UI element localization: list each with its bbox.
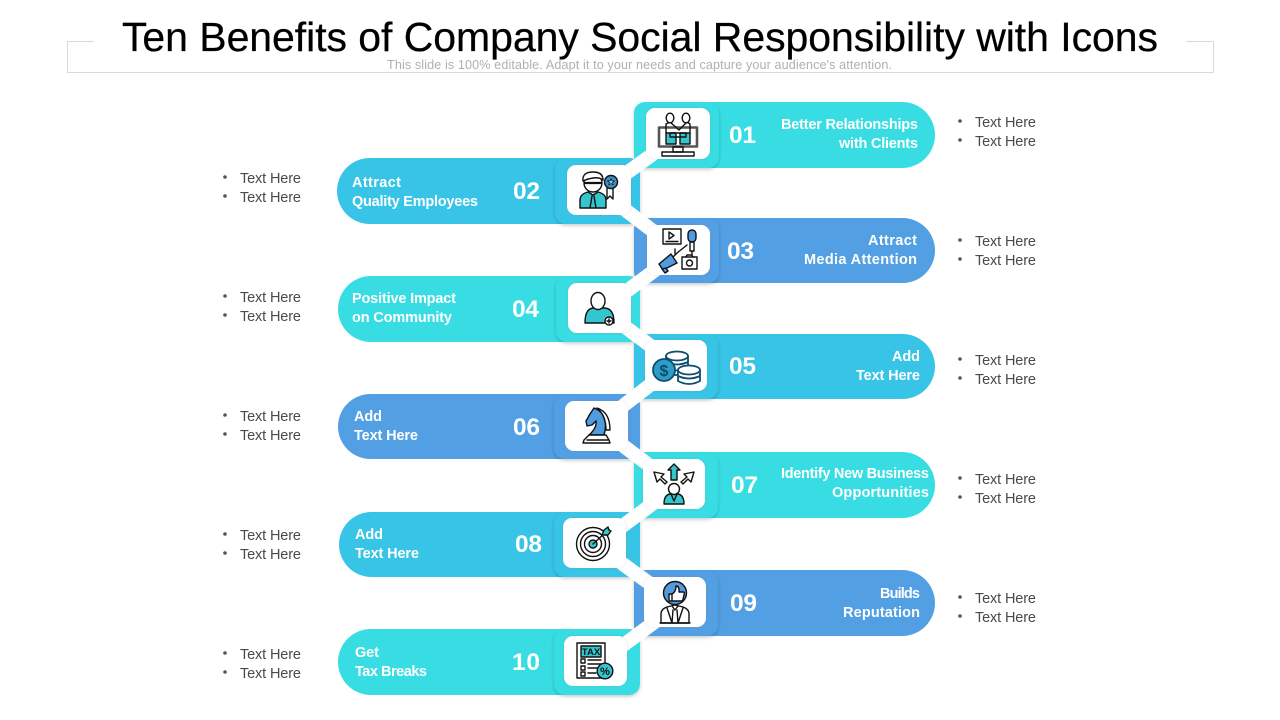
text list: benefit 02: Text Here — [240, 171, 301, 187]
panel: benefit 05 bar: Text Here — [856, 368, 920, 384]
icon: tax form with percent badge: TAX — [582, 647, 601, 658]
panel: benefit 07 bar: Opportunities — [832, 485, 929, 501]
text list: benefit 07: Text Here — [975, 472, 1036, 488]
panel: benefit 02 bar: 02 — [513, 178, 540, 205]
panel: benefit 05 bar: Add — [892, 349, 920, 365]
panel: benefit 10 bar — [338, 629, 640, 695]
icon: person with three arrows — [654, 464, 694, 504]
icon: businessman with thumbs up — [660, 582, 690, 623]
text list: benefit 03: Text Here — [975, 234, 1036, 250]
title: Ten Benefits of Company Social Responsibility with Icons — [122, 14, 1158, 60]
text list: benefit 04: Text Here — [240, 290, 301, 306]
text list: benefit 01: Text Here — [975, 115, 1036, 131]
text list: benefit 09: Text Here — [975, 610, 1036, 626]
panel: benefit 01 bar: 01 — [729, 122, 756, 149]
panel: benefit 05 bar — [634, 334, 935, 399]
text list: benefit 07: Text Here — [975, 491, 1036, 507]
panel: benefit 09 bar: Reputation — [843, 605, 920, 621]
panel: benefit 04 bar: 04 — [512, 296, 539, 323]
text list: benefit 10: Text Here — [240, 647, 301, 663]
panel: benefit 04 bar: Positive Impact — [352, 291, 456, 307]
text list: benefit 07 — [958, 472, 1036, 507]
text list: benefit 08: Text Here — [240, 547, 301, 563]
text list: benefit 10: Text Here — [240, 666, 301, 682]
panel: benefit 08 bar: Text Here — [355, 546, 419, 562]
icon: chess knight — [583, 408, 610, 443]
panel: benefit 05 bar: 05 — [729, 353, 756, 380]
panel: benefit 03 bar: Media Attention — [804, 252, 917, 268]
text list: benefit 08: Text Here — [240, 528, 301, 544]
panel: benefit 01 bar: with Clients — [838, 136, 918, 152]
text list: benefit 08 — [223, 528, 301, 563]
panel: benefit 08 bar: 08 — [515, 531, 542, 558]
icon: coins with dollar — [653, 352, 700, 384]
icon: employee with award ribbon — [580, 172, 618, 208]
text list: benefit 05: Text Here — [975, 353, 1036, 369]
panel: benefit 02 bar — [337, 158, 640, 224]
text list: benefit 09 — [958, 591, 1036, 626]
text list: benefit 01: Text Here — [975, 134, 1036, 150]
panel: benefit 03 bar: 03 — [727, 238, 754, 265]
text list: benefit 06 — [223, 409, 301, 444]
panel: benefit 10 bar: Get — [355, 645, 379, 661]
text list: benefit 05: Text Here — [975, 372, 1036, 388]
zigzag connector — [594, 136, 678, 666]
icon: person with plus badge — [585, 292, 614, 325]
icon: coins with dollar: $ — [660, 363, 669, 380]
text list: benefit 02 — [223, 171, 301, 206]
panel: benefit 06 bar: Add — [354, 409, 382, 425]
text list: benefit 06: Text Here — [240, 428, 301, 444]
panel: benefit 02 bar: Attract — [352, 175, 401, 191]
panel: benefit 06 bar: 06 — [513, 414, 540, 441]
icon: media microphone, video and megaphone — [659, 229, 697, 273]
panel: benefit 07 bar: Identify New Business — [781, 466, 929, 482]
text list: benefit 06: Text Here — [240, 409, 301, 425]
panel: benefit 10 bar: 10 — [512, 649, 540, 676]
panel: benefit 09 bar: Builds — [880, 586, 920, 602]
panel: benefit 06 bar: Text Here — [354, 428, 418, 444]
panel: benefit 04 bar: on Community — [352, 310, 452, 326]
panel: benefit 06 bar — [338, 394, 640, 459]
panel: benefit 04 bar — [338, 276, 640, 342]
panel: benefit 10 bar: Tax Breaks — [355, 664, 427, 680]
panel: benefit 07 bar — [634, 452, 935, 518]
panel: benefit 08 bar — [339, 512, 640, 577]
text list: benefit 04 — [223, 290, 301, 325]
white icon cards — [563, 108, 710, 686]
text list: benefit 04: Text Here — [240, 309, 301, 325]
text list: benefit 03 — [958, 234, 1036, 269]
header frame — [68, 42, 1214, 72]
icon: tax form with percent badge — [577, 643, 613, 679]
icon: client handshake on monitor — [659, 113, 697, 156]
text list: benefit 02: Text Here — [240, 190, 301, 206]
panel: benefit 07 bar: 07 — [731, 472, 758, 499]
panel: benefit 08 bar: Add — [355, 527, 383, 543]
panel: benefit 03 bar — [634, 218, 935, 283]
text list: benefit 01 — [958, 115, 1036, 150]
text list: benefit 03: Text Here — [975, 253, 1036, 269]
panel: benefit 09 bar: 09 — [730, 590, 757, 617]
panel: benefit 02 bar: Quality Employees — [352, 194, 478, 210]
panel: benefit 03 bar: Attract — [868, 233, 917, 249]
text list: benefit 09: Text Here — [975, 591, 1036, 607]
panel: benefit 01 bar: Better Relationships — [781, 117, 918, 133]
text list: benefit 10 — [223, 647, 301, 682]
icon: tax form with percent badge: % — [600, 666, 610, 678]
text list: benefit 05 — [958, 353, 1036, 388]
subtitle: This slide is 100% editable. Adapt it to your needs and capture your audience's attention. — [387, 58, 892, 72]
panel: benefit 09 bar — [634, 570, 935, 636]
icon: target with arrow — [576, 527, 611, 560]
panel: benefit 01 bar — [634, 102, 935, 168]
